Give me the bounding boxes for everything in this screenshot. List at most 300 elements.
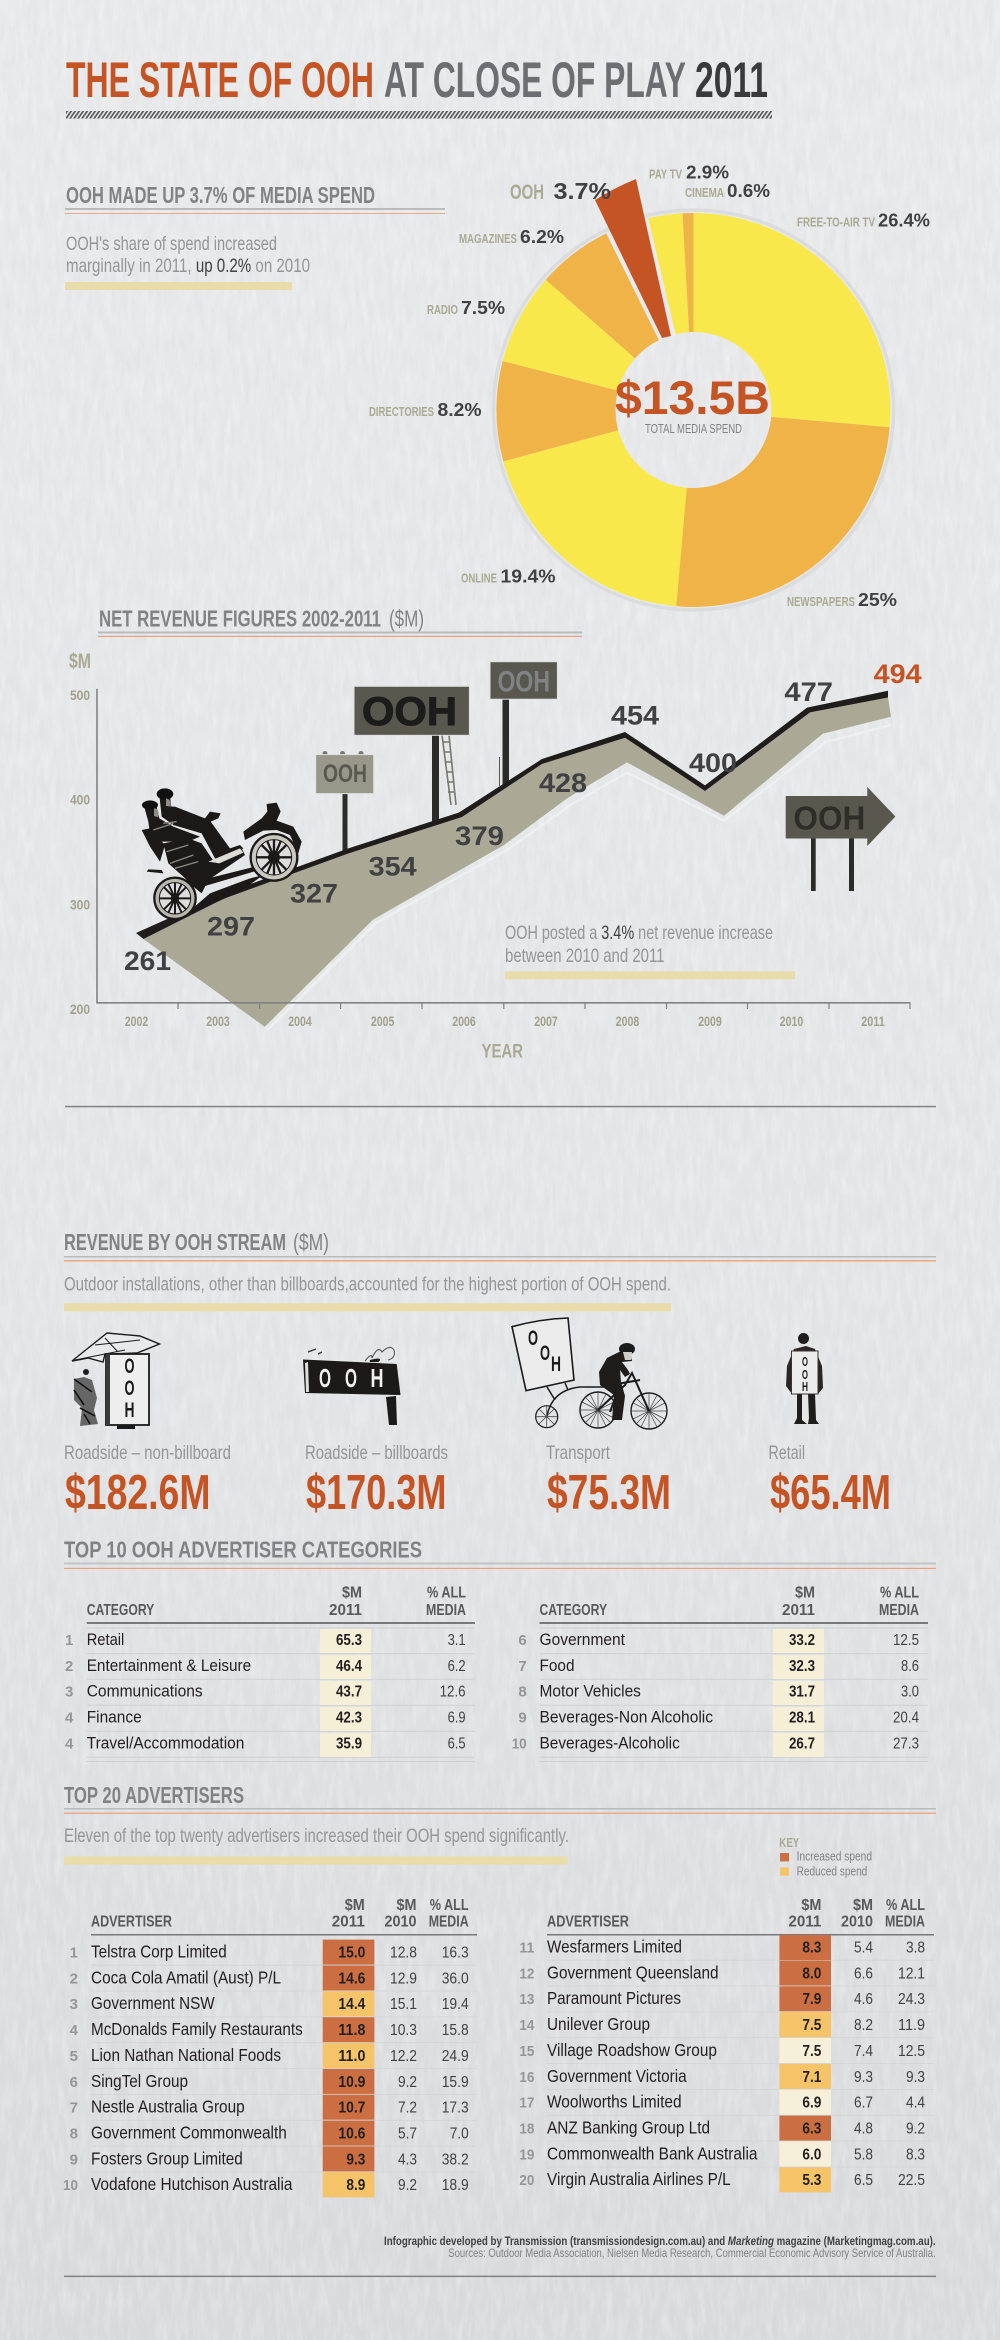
row: Beverages alcoholic: 27.3 xyxy=(893,1736,919,1753)
row: Communications xyxy=(65,1683,466,1701)
title xyxy=(66,52,768,108)
row 11 xyxy=(519,1935,925,1960)
row 15: 12.5 xyxy=(898,2043,925,2060)
value labels: 297 xyxy=(207,912,255,942)
row: Retail: Retail xyxy=(87,1631,124,1649)
row 19: Commonwealth Bank Australia xyxy=(547,2143,758,2163)
row 13: 13 xyxy=(519,1991,534,2008)
title: 2011 xyxy=(695,52,768,108)
row 10 xyxy=(63,2172,469,2197)
table: advertisers 11-20: ADVERTISER xyxy=(547,1913,629,1930)
row: Beverages alcoholic: 10 xyxy=(512,1736,527,1753)
label: directories: 8.2% xyxy=(438,399,482,420)
row 6: 15.9 xyxy=(442,2074,469,2091)
row 4: 11.8 xyxy=(338,2022,365,2039)
icon: cyclist towing sign: O xyxy=(528,1327,538,1350)
sign: OOH arrow xyxy=(786,787,895,891)
text: share of spend xyxy=(66,233,310,277)
row 10: 10 xyxy=(63,2177,78,2194)
table: advertisers 11-20 xyxy=(519,1897,934,2192)
row: Beverages non alcoholic: 20.4 xyxy=(893,1710,919,1727)
row: Food xyxy=(518,1657,919,1675)
x axis labels: 2009 xyxy=(698,1013,722,1029)
row 6: 6 xyxy=(70,2074,78,2091)
callout: 3.4% increase: OOH posted a 3.4% net revenue increase xyxy=(505,922,773,944)
row 18: 4.8 xyxy=(854,2120,873,2138)
stat: transport: Transport xyxy=(546,1442,610,1464)
table: advertisers 1-10: % ALL xyxy=(430,1897,469,1914)
table: advertisers 1-10: 2011 xyxy=(332,1913,365,1930)
row 14: 11.9 xyxy=(898,2017,925,2034)
row 14: Unilever Group xyxy=(547,2014,650,2034)
row: Finance: 4 xyxy=(65,1710,74,1727)
row: Finance: 42.3 xyxy=(336,1710,362,1727)
axes xyxy=(97,689,910,1009)
row: Entertainment xyxy=(65,1657,466,1675)
x axis labels: 2002 xyxy=(125,1013,148,1029)
row 12: Government Queensland xyxy=(547,1962,719,1982)
row 11: 5.4 xyxy=(854,1940,873,1956)
table: categories 6-10: 2011 xyxy=(782,1602,815,1619)
row 17: Woolworths Limited xyxy=(547,2092,682,2112)
table: categories 6-10: % ALL xyxy=(880,1585,919,1602)
stat: roadside non-billboard: $182.6M xyxy=(65,1466,210,1520)
row: Finance: 6.9 xyxy=(448,1710,466,1727)
row: Finance xyxy=(65,1709,466,1727)
row 20: 5.3 xyxy=(802,2172,821,2189)
value labels: 428 xyxy=(539,768,587,798)
row 15 xyxy=(519,2038,925,2063)
text: stream summary: Outdoor installations, other than billboards,accounted for the highest portion of OOH spend. xyxy=(64,1274,671,1296)
row 3 xyxy=(70,1991,469,2016)
stat: roadside non-billboard xyxy=(64,1442,231,1520)
label: magazines xyxy=(459,226,564,247)
row: Beverages non alcoholic: Beverages-Non Alcoholic xyxy=(540,1709,713,1727)
row 5: Lion Nathan National Foods xyxy=(91,2045,281,2065)
label: pay tv: PAY TV xyxy=(649,166,682,182)
x axis labels: 2008 xyxy=(616,1013,639,1029)
row: Entertainment: 46.4 xyxy=(336,1658,362,1675)
row 18: 18 xyxy=(519,2120,534,2138)
y axis labels: 400 xyxy=(70,792,90,808)
table: advertisers 1-10: $M xyxy=(396,1897,416,1914)
legend: spend key: KEY xyxy=(779,1835,800,1850)
row: Government: 6 xyxy=(518,1632,527,1649)
row 1: 15.0 xyxy=(338,1944,365,1962)
table: advertisers 1-10: MEDIA xyxy=(429,1913,469,1930)
row 10: 9.2 xyxy=(398,2177,417,2194)
row: Travel: Travel/Accommodation xyxy=(87,1735,244,1753)
y axis labels: 500 xyxy=(70,687,90,703)
label: free-to-air xyxy=(797,210,930,230)
sign: OOH arrow: OOH xyxy=(793,799,865,836)
table: categories 6-10: CATEGORY xyxy=(540,1602,607,1619)
icon: burning billboard xyxy=(303,1347,400,1425)
row: Government xyxy=(518,1631,919,1649)
row 7: 7.2 xyxy=(398,2100,417,2117)
icon: burning billboard: O xyxy=(319,1363,331,1393)
icon: bus shelter with person: H xyxy=(124,1399,134,1422)
row: Beverages alcoholic xyxy=(512,1735,919,1753)
row: Government: 12.5 xyxy=(893,1632,919,1649)
row: Communications: 12.6 xyxy=(440,1684,466,1701)
legend: spend key xyxy=(779,1835,872,1878)
stat: roadside billboards: Roadside – billboards xyxy=(305,1442,448,1464)
y axis labels: 300 xyxy=(70,896,90,912)
row 10: 18.9 xyxy=(442,2177,469,2194)
icon: burning billboard: O xyxy=(345,1363,357,1393)
stat: roadside billboards xyxy=(305,1442,448,1520)
row 19 xyxy=(519,2141,925,2166)
value labels: 354 xyxy=(369,851,417,881)
row: Travel xyxy=(65,1735,466,1753)
icon: cyclist towing sign: H xyxy=(551,1353,561,1376)
text: advertisers summary xyxy=(64,1825,569,1865)
y axis labels xyxy=(70,687,90,1017)
line chart: net revenue 2002-2011 xyxy=(69,650,922,1062)
callout: 3.4% increase: between 2010 and 2011 xyxy=(505,945,664,967)
icon: cyclist towing sign: O xyxy=(540,1342,550,1365)
heading: revenue by OOH stream: ($M) xyxy=(293,1229,329,1255)
row 16: 7.1 xyxy=(802,2069,821,2086)
row 1: 16.3 xyxy=(442,1944,469,1962)
row 11: 8.3 xyxy=(802,1940,821,1956)
row 13: 4.6 xyxy=(854,1991,873,2008)
donut chart: total media spend xyxy=(494,179,894,610)
segment: online xyxy=(503,430,687,606)
row 4 xyxy=(70,2017,469,2042)
heading: net revenue xyxy=(98,606,582,637)
sign: small OOH board: OOH xyxy=(323,760,367,788)
table: advertisers 11-20: MEDIA xyxy=(885,1913,925,1930)
legend: spend key: Increased spend xyxy=(797,1849,872,1864)
row 1 xyxy=(70,1940,469,1965)
row 8 xyxy=(70,2121,469,2146)
value labels: 261 xyxy=(124,946,171,976)
panel: revenue by stream xyxy=(64,1229,936,1520)
stat: retail: Retail xyxy=(768,1442,805,1464)
stat: retail xyxy=(768,1442,891,1520)
total value: $13.5B xyxy=(615,371,770,424)
row 15: 7.4 xyxy=(854,2043,873,2060)
label: newspapers xyxy=(787,589,897,610)
row: Government: 33.2 xyxy=(789,1632,815,1649)
panel: top 10 categories xyxy=(64,1536,936,1762)
row: Motor Vehicles: 8 xyxy=(518,1684,527,1701)
stat: roadside billboards: $170.3M xyxy=(306,1466,446,1520)
value labels: 454 xyxy=(611,700,659,730)
segment: OOH exploded xyxy=(595,179,671,338)
row: Entertainment: 6.2 xyxy=(448,1658,466,1675)
row 9: 9 xyxy=(70,2151,78,2168)
heading: revenue by OOH stream xyxy=(64,1229,936,1262)
row 1: Telstra Corp Limited xyxy=(91,1942,227,1962)
table: categories 1-5: $M xyxy=(342,1585,362,1602)
x axis labels: 2011 xyxy=(861,1013,885,1029)
row 8: 10.6 xyxy=(338,2126,365,2142)
row 4: 15.8 xyxy=(442,2022,469,2039)
segment: directories xyxy=(496,361,618,461)
line: revenue trend xyxy=(136,691,888,939)
row: Food: 32.3 xyxy=(789,1658,815,1675)
row 11: 11 xyxy=(519,1940,534,1956)
row 13: 24.3 xyxy=(898,1991,925,2008)
stat: retail: $65.4M xyxy=(770,1466,891,1520)
sign: large OOH billboard xyxy=(354,686,469,822)
value labels: 494 xyxy=(874,659,922,689)
row 18 xyxy=(519,2116,925,2141)
footer credits xyxy=(384,2234,936,2260)
value labels: 400 xyxy=(689,748,737,778)
label: OOH xyxy=(510,178,611,204)
row 9: 38.2 xyxy=(442,2151,469,2168)
row 14 xyxy=(519,2012,925,2037)
heading: OOH made up 3.7%: OOH MADE UP 3.7% OF MEDIA SPEND xyxy=(66,182,375,208)
label: cinema: 0.6% xyxy=(727,180,770,201)
stat: transport: $75.3M xyxy=(547,1466,671,1520)
row 6: 10.9 xyxy=(338,2074,365,2091)
row 11: 3.8 xyxy=(906,1940,925,1956)
icon: bus shelter with person xyxy=(72,1333,160,1429)
table: advertisers 11-20: 2011 xyxy=(788,1913,821,1930)
row 7 xyxy=(70,2095,469,2120)
x axis labels: 2006 xyxy=(452,1013,476,1029)
row 7: Nestle Australia Group xyxy=(91,2097,245,2117)
row: Entertainment: 2 xyxy=(65,1658,73,1675)
row 14: 14 xyxy=(519,2017,535,2034)
x axis labels: 2003 xyxy=(206,1013,230,1029)
row: Beverages non alcoholic xyxy=(518,1709,919,1727)
row: Food: Food xyxy=(540,1657,574,1675)
row: Retail: 3.1 xyxy=(448,1632,466,1649)
heading: net revenue: ($M) xyxy=(389,606,424,632)
table: categories 6-10: $M xyxy=(795,1585,815,1602)
x axis title: YEAR xyxy=(482,1042,523,1062)
row 12 xyxy=(519,1960,925,1986)
row 20 xyxy=(519,2167,925,2192)
row 9: 4.3 xyxy=(398,2151,417,2168)
row 17 xyxy=(519,2090,925,2115)
footer credits: Infographic developed by Transmission (transmissiondesign.com.au) and Marketing magazine (Marketingmag.com.au). xyxy=(384,2234,936,2248)
row 13: 7.9 xyxy=(802,1991,821,2008)
row 8: 7.0 xyxy=(450,2126,469,2142)
row 6 xyxy=(70,2069,469,2094)
row 1: 1 xyxy=(70,1944,78,1962)
row: Motor Vehicles xyxy=(518,1683,919,1701)
table: categories 1-5: % ALL xyxy=(427,1585,466,1602)
row 4: 10.3 xyxy=(390,2022,417,2039)
label: OOH: OOH xyxy=(510,181,544,204)
table: categories 6-10 xyxy=(512,1585,928,1762)
row 14: 7.5 xyxy=(802,2017,821,2034)
row 15: 15 xyxy=(519,2043,534,2060)
row 17: 4.4 xyxy=(906,2095,925,2112)
heading: top 10 categories: TOP 10 OOH ADVERTISER CATEGORIES xyxy=(64,1536,422,1562)
row 15: 7.5 xyxy=(802,2043,821,2060)
row 16: 9.3 xyxy=(906,2069,925,2086)
row 2: Coca Cola Amatil (Aust) P/L xyxy=(91,1967,281,1987)
label: online: 19.4% xyxy=(500,566,556,586)
panel: media share intro xyxy=(65,182,445,290)
row 20: 6.5 xyxy=(854,2172,873,2189)
row 2: 14.6 xyxy=(338,1970,365,1987)
label: radio xyxy=(427,297,505,318)
value labels xyxy=(124,659,922,976)
icon: sandwich board man: O xyxy=(802,1354,808,1369)
row 5: 24.9 xyxy=(442,2048,469,2065)
row 16: 9.3 xyxy=(854,2069,873,2086)
sign: large OOH billboard: OOH xyxy=(362,690,457,734)
segment: cinema xyxy=(682,213,694,332)
row: Motor Vehicles: 3.0 xyxy=(901,1684,919,1701)
row 13 xyxy=(519,1986,925,2011)
row 5: 5 xyxy=(70,2048,78,2065)
row 19: 19 xyxy=(519,2146,534,2163)
stat: transport xyxy=(546,1442,671,1520)
label: pay tv xyxy=(649,162,729,182)
table: advertisers 11-20: $M xyxy=(853,1897,873,1914)
row: Communications: Communications xyxy=(87,1683,203,1701)
segment: magazines xyxy=(546,233,659,358)
row 5: 11.0 xyxy=(338,2048,365,2065)
donut labels xyxy=(369,162,930,610)
row 1: 12.8 xyxy=(390,1944,417,1962)
table: advertisers 11-20: % ALL xyxy=(886,1897,925,1914)
title: THE STATE OF OOH xyxy=(66,52,374,108)
row 4: McDonalds Family Restaurants xyxy=(91,2019,303,2039)
row 18: 6.3 xyxy=(802,2120,821,2138)
row: Government: Government xyxy=(540,1631,625,1649)
label: newspapers: NEWSPAPERS xyxy=(787,594,855,609)
row 15: Village Roadshow Group xyxy=(547,2040,717,2060)
row: Motor Vehicles: 31.7 xyxy=(789,1684,815,1701)
row 3: 14.4 xyxy=(338,1996,365,2013)
illustration: vintage car xyxy=(142,788,302,919)
row 19: 8.3 xyxy=(906,2146,925,2163)
label: magazines: MAGAZINES xyxy=(459,231,517,246)
row 12: 12.1 xyxy=(898,1965,925,1982)
row 8: 8 xyxy=(70,2126,78,2142)
value labels: 327 xyxy=(290,878,338,908)
heading: top 20 advertisers: TOP 20 ADVERTISERS xyxy=(64,1782,244,1808)
label: magazines: 6.2% xyxy=(520,226,564,247)
icon: sandwich board man: H xyxy=(802,1379,808,1394)
row: Food: 7 xyxy=(518,1658,527,1675)
row 16: Government Victoria xyxy=(547,2066,687,2086)
sign: tall OOH board: OOH xyxy=(498,665,550,698)
text: share of spend: OOH's share of spend increased xyxy=(66,233,277,255)
y axis title: $M xyxy=(69,650,91,673)
row 10: Vodafone Hutchison Australia xyxy=(91,2174,293,2194)
row 12: 6.6 xyxy=(854,1965,873,1982)
text: share of spend: marginally in 2011, up 0.2% on 2010 xyxy=(66,255,310,277)
label: pay tv: 2.9% xyxy=(686,162,729,182)
row: Communications: 3 xyxy=(65,1684,73,1701)
table: advertisers 1-10 xyxy=(63,1897,477,2197)
x axis labels xyxy=(125,1013,885,1029)
row: Motor Vehicles: Motor Vehicles xyxy=(540,1683,641,1701)
row 8: 5.7 xyxy=(398,2126,417,2142)
row: Finance: Finance xyxy=(87,1709,142,1727)
panel: top 20 advertisers xyxy=(63,1782,936,2197)
row 19: 6.0 xyxy=(802,2146,821,2163)
label: OOH: 3.7% xyxy=(554,178,611,204)
icon: bus shelter with person: O xyxy=(124,1355,134,1378)
title: AT CLOSE OF PLAY xyxy=(384,52,686,108)
row 18: 9.2 xyxy=(906,2120,925,2138)
label: free-to-air: 26.4% xyxy=(878,210,930,230)
icon: sandwich board man xyxy=(786,1333,823,1424)
table: advertisers 11-20: 2010 xyxy=(841,1913,873,1930)
icon: sandwich board man: O xyxy=(802,1367,808,1382)
x axis labels: 2004 xyxy=(288,1013,312,1029)
row 4: 4 xyxy=(70,2022,79,2039)
row 18: ANZ Banking Group Ltd xyxy=(547,2118,710,2138)
total caption: TOTAL MEDIA SPEND xyxy=(645,421,742,436)
row 16 xyxy=(519,2064,925,2089)
table: categories 1-5 xyxy=(65,1585,475,1762)
row 3: 15.1 xyxy=(390,1996,417,2013)
sign: tall OOH board xyxy=(490,662,557,786)
label: directories: DIRECTORIES xyxy=(369,404,434,419)
row 7: 10.7 xyxy=(338,2100,365,2117)
row: Beverages non alcoholic: 9 xyxy=(518,1710,527,1727)
row: Beverages alcoholic: 26.7 xyxy=(789,1736,815,1753)
area: revenue band xyxy=(144,698,891,1027)
table: categories 1-5: MEDIA xyxy=(426,1602,466,1619)
x axis labels: 2010 xyxy=(780,1013,803,1029)
segment: pay tv xyxy=(648,213,689,334)
sign: small OOH board xyxy=(316,751,374,851)
row: Beverages non alcoholic: 28.1 xyxy=(789,1710,815,1727)
label: radio: RADIO xyxy=(427,302,458,317)
label: free-to-air: FREE-TO-AIR TV xyxy=(797,214,875,230)
row 2: 36.0 xyxy=(442,1970,469,1987)
row 6: 9.2 xyxy=(398,2074,417,2091)
row: Retail: 1 xyxy=(65,1632,73,1649)
row 6: SingTel Group xyxy=(91,2071,188,2091)
row 7: 7 xyxy=(70,2100,78,2117)
segment: newspapers xyxy=(676,417,890,607)
row 11: Wesfarmers Limited xyxy=(547,1936,682,1956)
row 12: 12 xyxy=(519,1965,534,1982)
icon: bus shelter with person: O xyxy=(124,1377,134,1400)
row: Entertainment: Entertainment & Leisure xyxy=(87,1657,251,1675)
table: categories 6-10: MEDIA xyxy=(879,1602,919,1619)
row 17: 6.7 xyxy=(854,2095,873,2112)
row 20: 20 xyxy=(519,2172,534,2189)
text: stream summary xyxy=(64,1274,671,1311)
row: Travel: 4 xyxy=(65,1736,74,1753)
value labels: 379 xyxy=(455,821,504,851)
row 3: 3 xyxy=(70,1996,78,2013)
row 7: 17.3 xyxy=(442,2100,469,2117)
row 9: Fosters Group Limited xyxy=(91,2148,243,2168)
row 3: Government NSW xyxy=(91,1993,215,2013)
row: Retail: 65.3 xyxy=(336,1632,362,1649)
table: categories 1-5: CATEGORY xyxy=(87,1602,155,1619)
row 9 xyxy=(70,2146,469,2171)
row 2: 2 xyxy=(70,1970,78,1987)
heading: revenue by OOH stream: REVENUE BY OOH STREAM xyxy=(64,1229,286,1255)
label: online: ONLINE xyxy=(461,570,497,586)
heading: net revenue: NET REVENUE FIGURES 2002-2011 xyxy=(99,606,381,632)
row 9: 9.3 xyxy=(346,2151,365,2168)
label: radio: 7.5% xyxy=(461,297,505,318)
table: advertisers 1-10: 2010 xyxy=(384,1913,417,1930)
row 19: 5.8 xyxy=(854,2146,873,2163)
callout: 3.4% increase xyxy=(505,922,795,979)
